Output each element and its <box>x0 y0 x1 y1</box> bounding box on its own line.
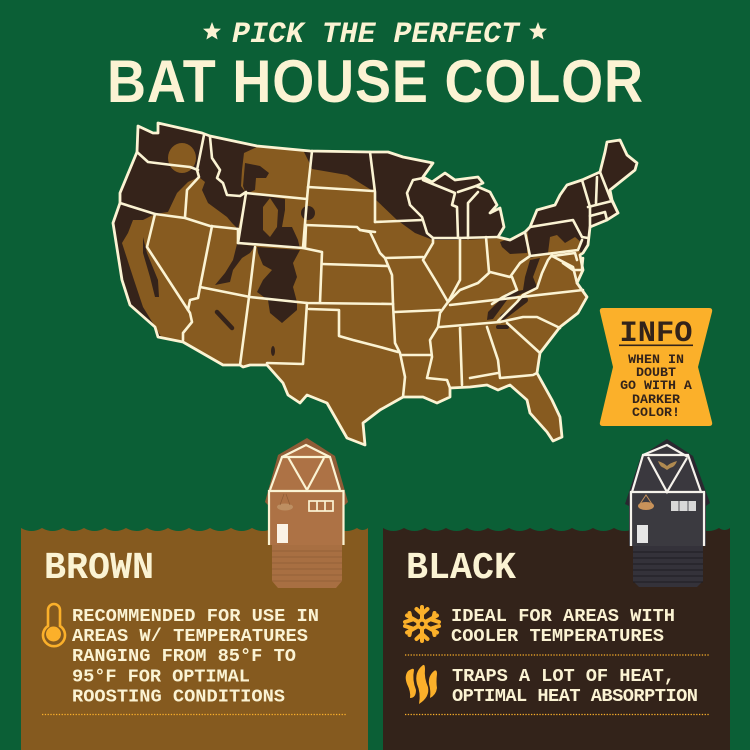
house slats <box>272 545 342 588</box>
black description two <box>452 665 698 707</box>
title main: BAT HOUSE COLOR <box>107 48 643 116</box>
house window <box>309 501 333 511</box>
icon: thermometer <box>43 604 65 646</box>
icon: heat waves <box>406 665 437 704</box>
brown description: AREAS W/ TEMPERATURES <box>72 625 308 647</box>
badge text <box>620 352 692 420</box>
brown description <box>72 605 319 708</box>
map of the United States <box>100 120 645 445</box>
black description one: IDEAL FOR AREAS WITH <box>451 605 675 627</box>
icon: right star <box>529 22 547 40</box>
title kicker: PICK THE PERFECT <box>232 18 521 52</box>
house door <box>637 525 648 543</box>
black description two: TRAPS A LOT OF HEAT, <box>452 665 675 687</box>
panel background <box>383 528 730 750</box>
black bat house <box>625 439 710 587</box>
house emblem <box>658 461 677 470</box>
brown description: RECOMMENDED FOR USE IN <box>72 605 319 627</box>
map: warm pockets over dark regions <box>168 143 278 237</box>
badge text: DOUBT <box>636 365 676 380</box>
panel: brown <box>21 528 368 750</box>
black description two: OPTIMAL HEAT ABSORPTION <box>452 685 698 707</box>
brown description: RANGING FROM 85°F TO <box>72 645 296 667</box>
house roof <box>625 439 710 506</box>
icon: snowflake <box>405 607 439 641</box>
panel heading: BROWN <box>44 547 154 590</box>
house door <box>277 524 288 543</box>
black description one <box>451 605 675 647</box>
house sign <box>638 495 654 510</box>
map land <box>113 123 637 445</box>
house slats <box>633 546 703 587</box>
badge shape <box>600 308 712 426</box>
title <box>107 18 643 116</box>
map outline <box>113 123 637 445</box>
badge text: DARKER <box>632 392 680 407</box>
house body <box>268 491 344 545</box>
brown description: 95°F FOR OPTIMAL <box>72 666 250 688</box>
map: dark cool-climate regions <box>100 120 645 356</box>
badge text: WHEN IN <box>628 352 684 367</box>
map: state borders <box>120 135 618 397</box>
icon: left star <box>203 22 221 40</box>
panel: black <box>383 528 730 750</box>
panel background <box>21 528 368 750</box>
house window <box>671 501 696 511</box>
badge text: COLOR! <box>632 405 680 420</box>
house body <box>629 492 706 546</box>
panel heading: BLACK <box>406 547 516 590</box>
house roof <box>265 438 348 505</box>
info badge <box>600 308 712 426</box>
badge heading: INFO <box>620 317 692 351</box>
brown description: ROOSTING CONDITIONS <box>72 686 285 708</box>
badge text: GO WITH A <box>620 378 692 393</box>
black description one: COOLER TEMPERATURES <box>451 625 664 647</box>
brown bat house <box>265 438 348 588</box>
house sign <box>277 494 293 510</box>
